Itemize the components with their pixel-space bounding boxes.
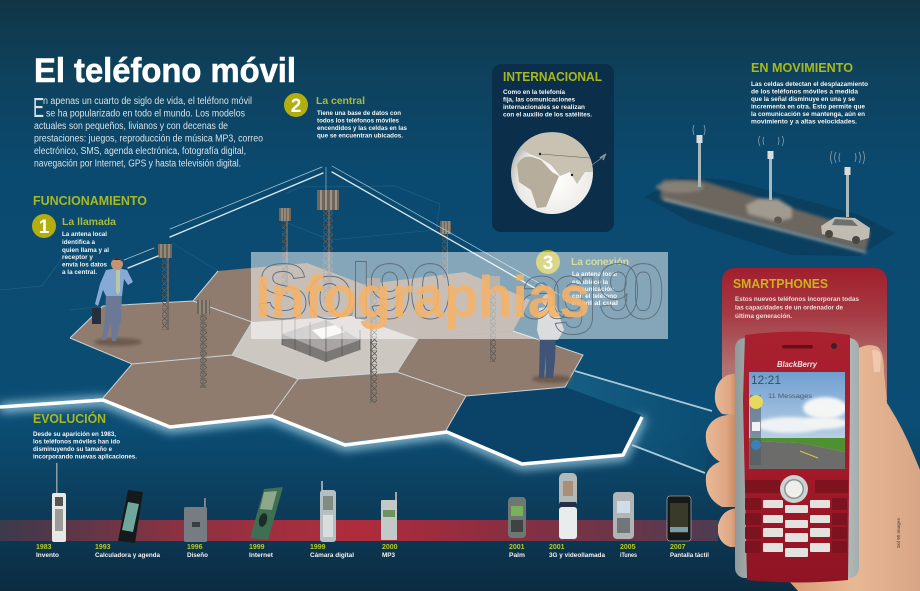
phone 1999 camera — [320, 481, 336, 542]
label 2007: Pantalla táctil — [670, 552, 709, 559]
step 1 text: receptor y — [62, 254, 93, 261]
intro text block: navegación por Internet, GPS y hasta televisión digital. — [34, 158, 241, 170]
text: Estos nuevos teléfonos incorporan todas — [735, 296, 859, 303]
panel text: Como en la telefonía — [503, 89, 565, 96]
palm and thumb — [788, 345, 920, 591]
faint network lines — [0, 186, 440, 310]
phone 2000 — [381, 492, 397, 540]
phone 1983 — [52, 463, 66, 542]
heading: INTERNACIONAL — [503, 70, 602, 84]
label 1999 camera: 1999 — [310, 544, 326, 551]
hex: top right — [352, 272, 530, 339]
step 1: la llamada — [32, 214, 116, 276]
evolution text: los teléfonos móviles han ido — [33, 438, 120, 446]
signal lines to smartphone — [575, 371, 712, 473]
panel text — [503, 89, 592, 118]
head — [111, 258, 123, 270]
phone 2007 — [667, 496, 691, 541]
phone 1996 — [184, 498, 207, 542]
panel: smartphones — [722, 268, 887, 400]
glow under hexagons — [0, 401, 642, 465]
step 3 text — [572, 271, 618, 307]
text: última generación. — [735, 313, 792, 320]
step 2: la central — [284, 93, 407, 140]
intro text block: electrónico, SMS, agenda electrónica, fotografía digital, — [34, 146, 246, 157]
tower 7 — [486, 276, 500, 362]
base station building — [282, 318, 360, 362]
tie — [116, 270, 120, 295]
label 1993: 1993 — [95, 544, 111, 551]
satellite — [592, 154, 606, 165]
white keys — [763, 500, 830, 557]
label 1999 camera: Cámara digital — [310, 552, 354, 559]
hex: center — [232, 316, 418, 379]
step 2 text: Tiene una base de datos con — [317, 110, 401, 117]
pole 3 — [830, 151, 864, 217]
glowing lower edge — [0, 400, 642, 464]
panel text: fija, las comunicaciones — [503, 96, 575, 104]
phone 2005 — [613, 492, 634, 539]
title: El teléfono móvil — [34, 52, 296, 90]
watermark panel — [251, 252, 668, 339]
phone 2001 3G — [559, 473, 577, 539]
panel: internacional — [492, 64, 614, 232]
tower 4 — [317, 167, 339, 302]
brand: BlackBerry — [777, 359, 818, 369]
tower 2 — [197, 300, 210, 388]
label 1996: Diseño — [187, 552, 208, 559]
heading: SMARTPHONES — [733, 277, 828, 291]
badge 1: 1 — [39, 217, 50, 238]
panel background — [722, 268, 887, 400]
top keys — [745, 480, 848, 493]
step 3: la conexion — [536, 250, 629, 307]
step 3 text: con el teléfono — [572, 293, 617, 300]
tower 5 — [440, 221, 451, 278]
hex: top — [193, 263, 365, 322]
panel: en movimiento — [645, 61, 895, 256]
label 1999 camera — [310, 544, 354, 559]
tower 6 — [366, 278, 380, 403]
intro text block: prestaciones: juegos, reproducción de música MP3, correo — [34, 134, 263, 144]
speaker — [782, 345, 813, 348]
camera — [831, 343, 837, 349]
label 1996: 1996 — [187, 544, 203, 551]
finger 1 — [715, 374, 740, 416]
road — [660, 180, 870, 252]
tower 1 — [158, 244, 172, 330]
step 1 text — [62, 231, 109, 276]
label 2001 palm — [509, 544, 525, 559]
text — [735, 296, 859, 320]
watermark outline text: Sol90 — [257, 247, 452, 335]
text: Las celdas detectan el desplazamiento — [751, 81, 868, 88]
trackball — [780, 475, 808, 503]
label 2000 — [382, 544, 398, 559]
panel text: con el auxilio de los satélites. — [503, 112, 592, 118]
label 2001 3G: 2001 — [549, 544, 565, 551]
timeline labels — [36, 544, 709, 559]
shadow — [532, 375, 572, 383]
trousers — [539, 335, 556, 378]
antenna towers — [158, 167, 500, 403]
label 1983: Invento — [36, 552, 59, 559]
intro text block — [33, 92, 263, 170]
label 1996 — [187, 544, 208, 559]
label 2000: MP3 — [382, 552, 395, 559]
label 2005: 2005 — [620, 544, 636, 551]
label 2007 — [670, 544, 709, 559]
watermark outline text — [257, 247, 665, 335]
watermark outline text: 90 — [597, 247, 665, 335]
text: la comunicación se mantenga, aún en — [751, 111, 865, 118]
finger 4 — [718, 508, 740, 547]
watermark outline text: ag — [520, 247, 598, 335]
heading: funcionamiento: FUNCIONAMIENTO — [33, 194, 147, 208]
hex: caller — [70, 301, 252, 364]
step 3 text: móvil al cual — [572, 300, 618, 307]
shirt — [95, 268, 133, 306]
person calling — [92, 258, 142, 346]
photo credit: Sol 90 Images — [896, 517, 901, 548]
text: incrementa en otra. Esto permite que — [751, 104, 865, 110]
hex: bottom middle — [272, 372, 466, 442]
text: las capacidades de un ordenador de — [735, 304, 843, 312]
intro text block: se ha popularizado en todo el mundo. Los modelos — [46, 108, 245, 120]
label 2001 palm: Palm — [509, 552, 525, 559]
label 2005: iTunes — [620, 552, 637, 559]
hex: dark empty — [445, 387, 641, 463]
hexagon grid — [0, 263, 642, 465]
step 2 text — [317, 110, 407, 140]
tower 3 — [279, 208, 291, 294]
signal arrows — [124, 166, 560, 295]
hex: receiver — [397, 331, 583, 396]
text: que la señal disminuye en una y se — [751, 96, 855, 103]
step 3 text: comunicación — [572, 286, 614, 293]
label 2007: 2007 — [670, 544, 686, 551]
car 2 — [746, 199, 792, 224]
step 1 text: a la central. — [62, 269, 97, 276]
step 1 text: quien llama y al — [62, 247, 109, 254]
side keys — [745, 498, 847, 553]
step 1 heading: La llamada — [62, 216, 116, 228]
watermark — [251, 247, 668, 339]
label 2001 3G — [549, 544, 605, 559]
label 2001 3G: 3G y videollamada — [549, 552, 605, 559]
hex edges — [70, 271, 583, 432]
step 3 text: La antena local — [572, 271, 617, 278]
road hexagons — [645, 177, 895, 256]
globe — [511, 132, 596, 214]
phone timeline — [52, 463, 691, 543]
label 1999 internet: 1999 — [249, 544, 265, 551]
shadow — [94, 338, 142, 346]
hex: bottom left — [103, 355, 298, 428]
drop cap: E — [33, 92, 44, 123]
thumbnail — [872, 350, 881, 372]
hand holding phone — [706, 345, 920, 591]
intro text block: n apenas un cuarto de siglo de vida, el teléfono móvil — [43, 96, 252, 107]
text: de los teléfonos móviles a medida — [751, 88, 858, 96]
red body — [743, 332, 850, 582]
silver sides — [735, 338, 859, 578]
phone 1993 — [118, 490, 143, 543]
heading: evolucion: EVOLUCIÓN — [33, 411, 106, 426]
car 3 — [821, 217, 870, 244]
label 1993 — [95, 544, 160, 559]
pole 1 — [693, 125, 705, 187]
step 2 text: encendidos y las celdas en las — [317, 125, 407, 132]
step 2 text: todos los teléfonos móviles — [317, 118, 399, 124]
finger 3 — [706, 460, 740, 507]
step 2 text: que se encuentran ubicados. — [317, 132, 403, 140]
heading: EN MOVIMIENTO — [751, 61, 853, 75]
text — [751, 81, 868, 126]
label 1983: 1983 — [36, 544, 52, 551]
panel background — [492, 64, 614, 232]
step 1 text: identifica a — [62, 239, 95, 246]
briefcase — [92, 308, 101, 324]
label 2000: 2000 — [382, 544, 398, 551]
label 2001 palm: 2001 — [509, 544, 525, 551]
evolution text: disminuyendo su tamaño e — [33, 446, 112, 453]
phone 1999 internet — [250, 487, 283, 540]
screen — [749, 372, 847, 469]
step 1 text: envía los datos — [62, 262, 107, 268]
text: movimiento y a altas velocidades. — [751, 118, 857, 126]
panel text: internacionales se realizan — [503, 104, 585, 111]
phone 2001 palm — [508, 497, 526, 538]
blackberry phone — [735, 332, 859, 582]
step 3 text: establece la — [572, 279, 608, 286]
step 3 heading: La conexión — [571, 256, 629, 268]
badge 2: 2 — [291, 96, 301, 117]
screen: 12:21 — [751, 375, 781, 387]
watermark orange text: Infographias — [255, 265, 590, 330]
badge 3: 3 — [543, 253, 553, 274]
label 1983 — [36, 544, 59, 559]
label 1999 internet — [249, 544, 274, 559]
evolution text: Desde su aparición en 1983, — [33, 431, 116, 438]
evolution text: incorporando nuevas aplicaciones. — [33, 454, 137, 460]
label 2005 — [620, 544, 637, 559]
screen: 11 Messages — [768, 393, 813, 400]
step 1 text: La antena local — [62, 231, 107, 238]
moving car blur — [656, 181, 704, 193]
shirt — [537, 306, 564, 340]
trousers — [102, 292, 122, 341]
pole 2 — [758, 136, 784, 200]
intro text block: actuales son pequeños, livianos y con decenas de — [34, 121, 228, 132]
evolution text — [33, 431, 137, 460]
timeline band — [0, 520, 718, 541]
head — [542, 294, 554, 306]
step 2 heading: La central — [316, 95, 365, 107]
finger 2 — [706, 415, 740, 462]
label 1993: Calculadora y agenda — [95, 552, 160, 559]
band of signal toward phone — [566, 372, 712, 473]
person receiving — [532, 294, 572, 383]
label 1999 internet: Internet — [249, 552, 274, 559]
